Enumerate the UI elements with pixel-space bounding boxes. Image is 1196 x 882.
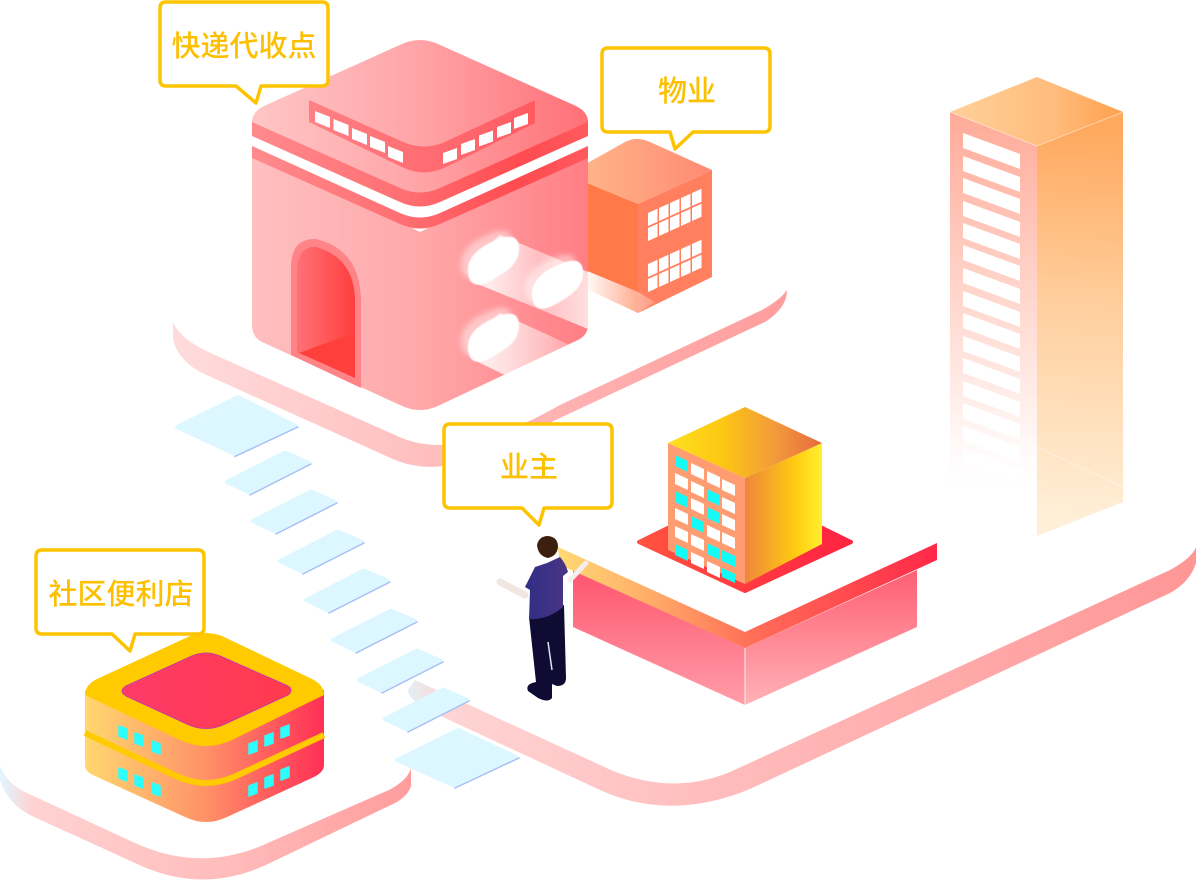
apartment base <box>639 490 851 591</box>
apartment cyan windows <box>675 455 735 583</box>
tile 4 <box>280 532 362 572</box>
convenience store <box>85 633 324 822</box>
left arm <box>500 582 525 595</box>
callout: 快递代收点 <box>160 2 328 103</box>
counter left face <box>573 570 745 705</box>
oval window upper right <box>532 261 583 309</box>
callout: 物业: 物业 <box>658 75 716 108</box>
neck <box>542 556 554 564</box>
apartment left face <box>668 443 745 584</box>
apartment white windows <box>675 463 735 578</box>
tower ground line <box>950 112 1123 487</box>
platform edge: upper <box>173 290 787 467</box>
head <box>537 536 558 558</box>
block roof <box>575 139 712 204</box>
store roof inset <box>122 653 291 728</box>
roof box windows <box>315 111 528 164</box>
right arm <box>570 563 586 580</box>
small orange building <box>575 139 712 313</box>
door opening <box>297 247 355 378</box>
callout: 业主 <box>444 424 612 525</box>
counter right face <box>745 570 917 705</box>
block left face <box>580 180 638 313</box>
callout: 业主: 业主 <box>500 451 558 484</box>
roof top <box>252 40 588 192</box>
tile 5 <box>306 570 388 611</box>
oval window upper left <box>468 237 519 285</box>
tower windows <box>963 133 1020 484</box>
person <box>500 536 586 700</box>
platform edge: main <box>408 547 1196 806</box>
roof box side <box>309 100 535 172</box>
counter top strip <box>558 543 937 648</box>
stepping tiles <box>177 397 516 786</box>
tile 8 <box>385 690 467 730</box>
tile 7 <box>359 650 441 691</box>
callout: 社区便利店: 社区便利店 <box>48 578 194 611</box>
legs <box>527 605 566 700</box>
tile shadow edges <box>235 427 519 788</box>
light streak upper <box>470 235 588 329</box>
light streak over block <box>580 268 655 313</box>
building body <box>252 150 588 410</box>
store middle band <box>85 733 324 783</box>
door frame <box>291 239 361 388</box>
oval window lower <box>468 314 519 362</box>
callout: 快递代收点: 快递代收点 <box>171 30 317 63</box>
apartment roof <box>668 407 822 478</box>
tile 6 <box>333 610 415 651</box>
store body <box>85 690 324 822</box>
tower building <box>950 77 1123 536</box>
platform edge: lower left <box>0 766 411 880</box>
apartment building <box>639 407 851 591</box>
block windows <box>648 189 702 292</box>
light streak lower <box>470 313 572 376</box>
store roof <box>85 633 324 746</box>
leg gap <box>548 642 552 670</box>
door floor <box>299 333 354 377</box>
roof side band <box>252 120 588 206</box>
shirt <box>525 557 568 619</box>
tower right face <box>1037 112 1123 536</box>
main pink building <box>252 40 588 410</box>
tile large bottom <box>397 730 516 786</box>
tile 2 <box>227 452 309 493</box>
counter edge highlight <box>744 648 746 705</box>
window glow <box>461 231 576 356</box>
callout: 社区便利店 <box>36 550 204 651</box>
counter platform <box>558 543 937 705</box>
tower roof <box>950 77 1123 146</box>
apartment right face <box>745 443 822 584</box>
tile 3 <box>253 492 335 532</box>
tile large top <box>177 397 296 454</box>
white stripe <box>252 136 588 220</box>
callout: 物业 <box>602 48 770 149</box>
block right face <box>638 170 712 313</box>
lower roof band <box>252 146 588 228</box>
store windows <box>119 725 289 796</box>
tower left face <box>950 112 1037 536</box>
